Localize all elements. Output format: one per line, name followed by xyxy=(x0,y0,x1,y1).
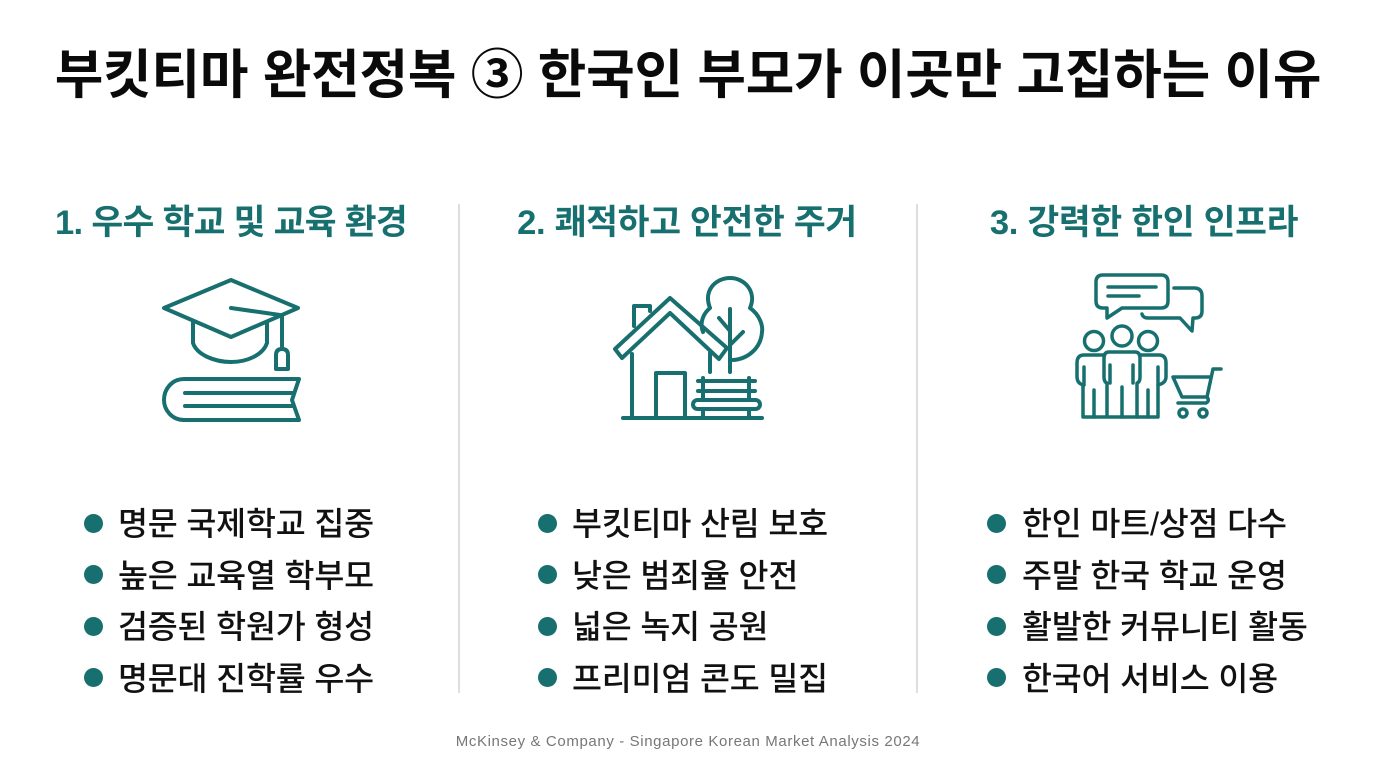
panel: housing heading: 2. 쾌적하고 안전한 주거 xyxy=(517,204,857,242)
panel: community list: 주말 한국 학교 운영 xyxy=(1022,557,1287,594)
panel: community heading: 3. 강력한 한인 인프라 xyxy=(990,204,1298,242)
panel: education heading: 1. 우수 학교 및 교육 환경 xyxy=(55,204,407,242)
panel: community list: 한인 마트/상점 다수 xyxy=(1022,505,1287,542)
panel: education list: 명문대 진학률 우수 xyxy=(118,660,374,697)
panel: housing list: 낮은 범죄율 안전 xyxy=(572,557,798,594)
panel: community list xyxy=(987,505,1308,697)
panel: housing list: 넓은 녹지 공원 xyxy=(572,608,768,645)
panel: education list: 검증된 학원가 형성 xyxy=(118,608,374,645)
panel: community list: 활발한 커뮤니티 활동 xyxy=(1022,608,1308,645)
title: 부킷티마 완전정복 ③ 한국인 부모가 이곳만 고집하는 이유 xyxy=(55,46,1321,105)
panel: education list xyxy=(84,505,374,697)
footer source: McKinsey & Company - Singapore Korean Market Analysis 2024 xyxy=(456,733,920,750)
panel: housing list: 부킷티마 산림 보호 xyxy=(572,505,828,542)
panel: education list: 높은 교육열 학부모 xyxy=(118,557,374,594)
panel: housing list xyxy=(538,505,828,697)
panel: housing list: 프리미엄 콘도 밀집 xyxy=(572,660,828,697)
panel: education list: 명문 국제학교 집중 xyxy=(118,505,374,542)
panel: community list: 한국어 서비스 이용 xyxy=(1022,660,1278,697)
